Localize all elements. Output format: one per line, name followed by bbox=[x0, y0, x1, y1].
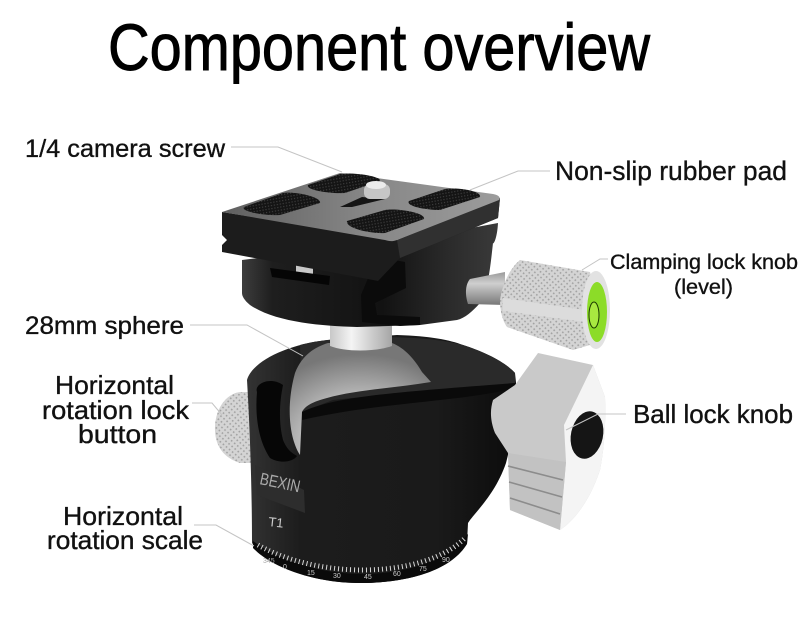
label: clamping lock knob (level): Clamping lock knob bbox=[610, 251, 798, 274]
label: ball lock knob: Ball lock knob bbox=[633, 399, 793, 429]
clamping lock knob with level bbox=[466, 260, 610, 350]
brand badge: BEXIN bbox=[258, 470, 302, 497]
rotation lock slot bbox=[256, 381, 297, 462]
label: clamping lock knob (level) bbox=[582, 251, 798, 299]
ball head body bbox=[247, 335, 516, 583]
horizontal rotation scale: 30 bbox=[333, 573, 341, 580]
label: 28mm sphere bbox=[25, 312, 303, 356]
non-slip rubber pads bbox=[244, 173, 480, 233]
label: horizontal rotation lock button: button bbox=[78, 419, 157, 449]
horizontal rotation scale: 45 bbox=[364, 574, 372, 581]
label: 1/4 camera screw bbox=[25, 135, 342, 172]
horizontal rotation scale: 15 bbox=[307, 570, 315, 577]
label: horizontal rotation lock button bbox=[42, 370, 222, 449]
label: horizontal rotation lock button: Horizontal bbox=[55, 370, 174, 400]
brand badge bbox=[255, 465, 305, 531]
label: ball lock knob bbox=[566, 399, 793, 430]
label: 1/4 camera screw: 1/4 camera screw bbox=[25, 135, 226, 163]
label: non-slip rubber pad: Non-slip rubber pad bbox=[555, 156, 787, 186]
horizontal rotation scale: 60 bbox=[393, 571, 401, 578]
label: clamping lock knob (level): (level) bbox=[674, 276, 733, 299]
clamp base bbox=[242, 223, 498, 327]
camera screw bbox=[340, 197, 385, 207]
horizontal rotation scale: 345 bbox=[263, 558, 275, 565]
horizontal rotation scale: 0 bbox=[283, 564, 287, 571]
icon: horizontal rotation lock button bbox=[215, 392, 252, 463]
quick release plate bbox=[222, 173, 500, 281]
label: horizontal rotation scale bbox=[47, 501, 254, 555]
label: non-slip rubber pad bbox=[470, 156, 787, 190]
ball lock knob bbox=[491, 353, 608, 530]
brand badge: T1 bbox=[268, 514, 284, 531]
28mm sphere bbox=[290, 343, 431, 455]
product photo: ball head bbox=[215, 173, 610, 583]
horizontal rotation scale: 75 bbox=[419, 566, 427, 573]
ball lock knob stem bbox=[491, 385, 530, 440]
neck bbox=[330, 322, 392, 350]
label: 28mm sphere: 28mm sphere bbox=[25, 312, 184, 340]
title: Component overview bbox=[108, 10, 650, 84]
label: horizontal rotation lock button: rotation lock bbox=[42, 395, 190, 425]
label: horizontal rotation scale: Horizontal bbox=[63, 501, 183, 531]
label: horizontal rotation scale: rotation scale bbox=[47, 525, 203, 555]
horizontal rotation scale: 90 bbox=[442, 557, 450, 564]
horizontal rotation scale bbox=[253, 534, 468, 583]
